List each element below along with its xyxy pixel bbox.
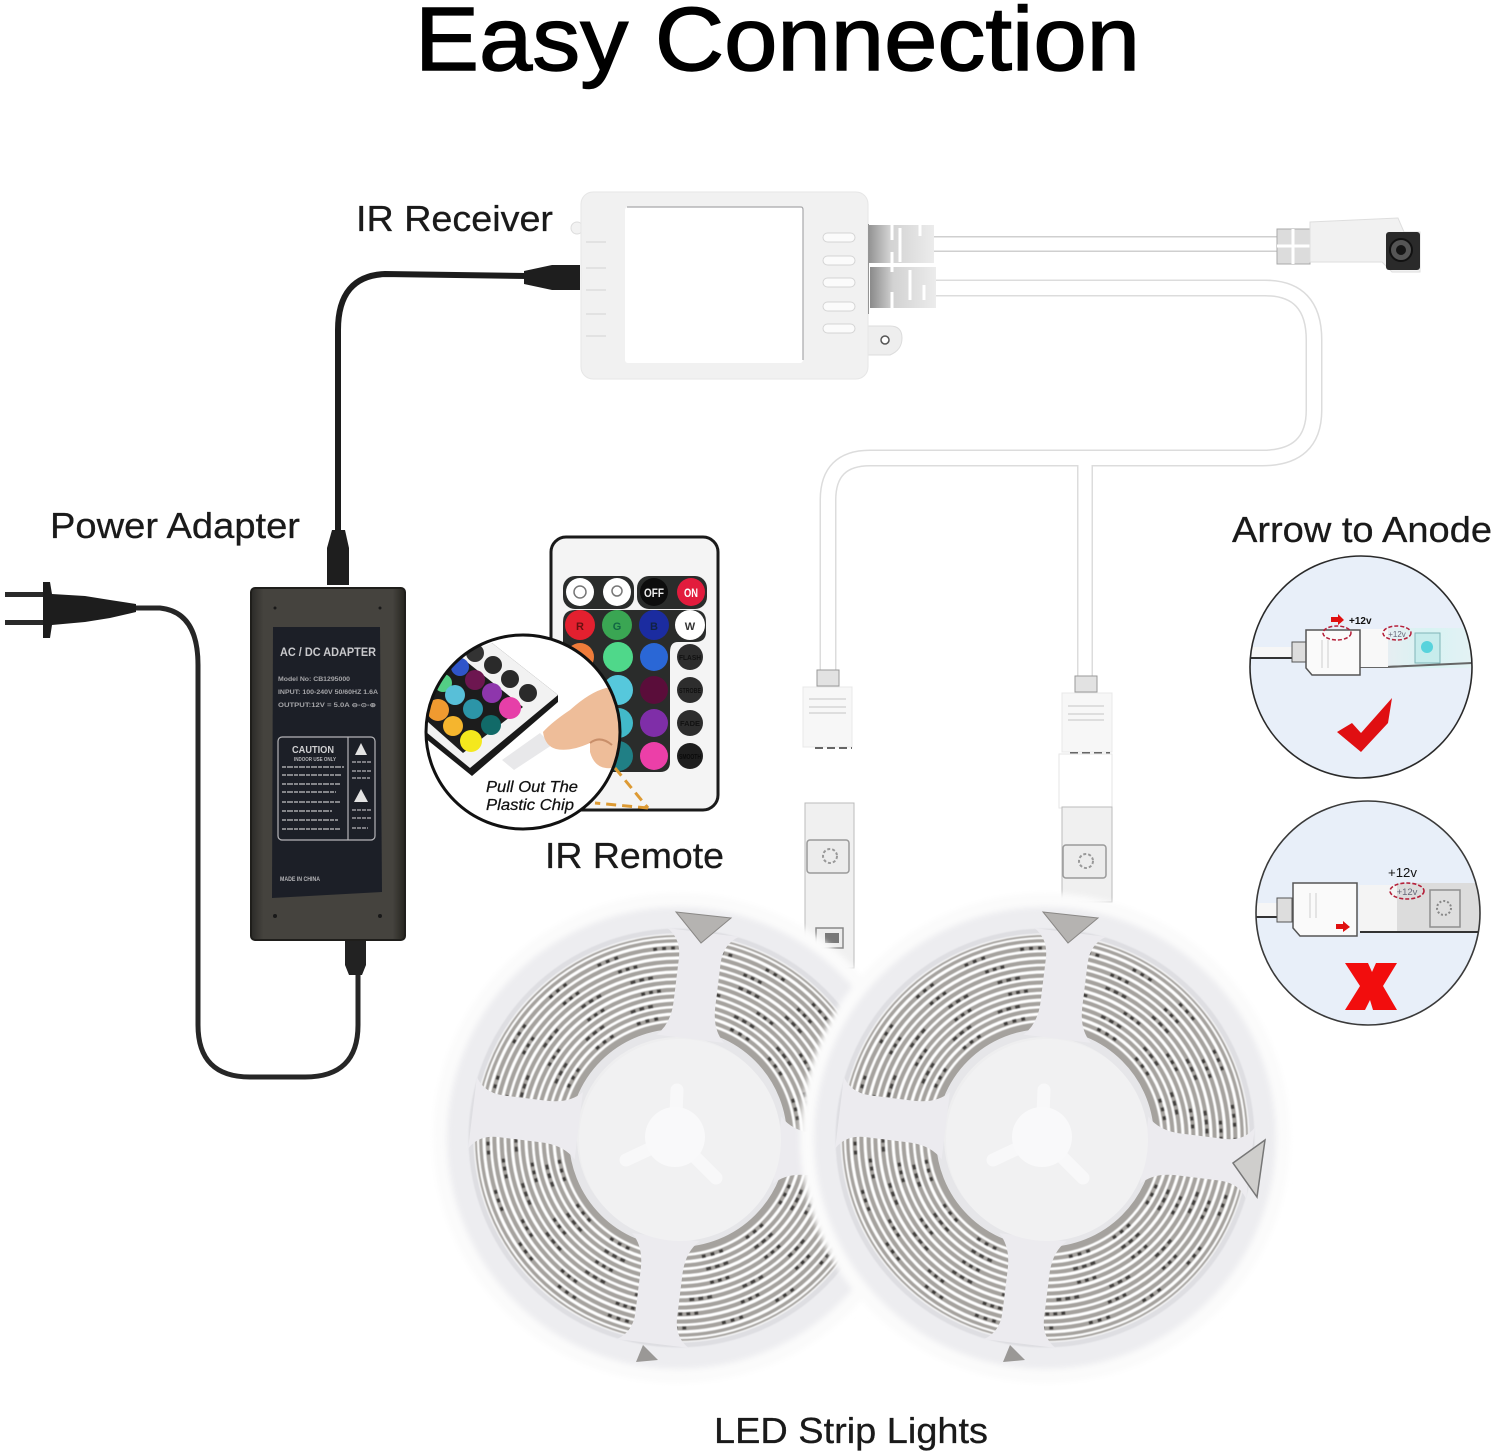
correct connection circle bbox=[1250, 556, 1472, 778]
IR remote: FLASH bbox=[679, 655, 701, 662]
IR remote: R bbox=[576, 621, 584, 633]
IR remote: B bbox=[650, 621, 658, 633]
adapter label: MADE IN CHINA bbox=[280, 877, 321, 883]
icon: red X mark bbox=[1345, 963, 1397, 1010]
LED strip connector: right bbox=[1059, 676, 1112, 902]
correct connection circle: +12v bbox=[1349, 616, 1372, 627]
adapter label: INPUT: 100-240V 50/60HZ 1.6A bbox=[278, 690, 379, 696]
correct connection circle: +12v bbox=[1388, 630, 1406, 639]
IR remote: ON bbox=[684, 586, 698, 600]
IR remote: G bbox=[613, 621, 621, 633]
adapter label: AC / DC ADAPTER bbox=[280, 645, 376, 659]
icon: red check mark bbox=[1337, 698, 1392, 752]
label: IR Receiver: IR Receiver bbox=[356, 198, 553, 239]
inset caption: Plastic Chip bbox=[486, 797, 574, 814]
callout: orange dashed lines bbox=[595, 768, 648, 808]
adapter label: CAUTION bbox=[292, 745, 334, 756]
adapter label: INDOOR USE ONLY bbox=[294, 757, 337, 763]
power cord: adapter to receiver bbox=[327, 265, 580, 585]
IR remote bbox=[551, 537, 718, 810]
adapter label: Model No: CB1295000 bbox=[278, 677, 351, 683]
icon: wall plug bbox=[5, 582, 136, 638]
label: Power Adapter: Power Adapter bbox=[50, 505, 300, 546]
IR receiver controller box bbox=[571, 192, 936, 379]
inset: pull out the plastic chip bbox=[420, 635, 630, 829]
inset caption bbox=[486, 779, 578, 814]
label: Arrow to Anode: Arrow to Anode bbox=[1232, 509, 1492, 550]
LED strip reel: right bbox=[800, 893, 1290, 1383]
IR remote: FADE bbox=[680, 721, 700, 728]
wrong connection circle: +12v bbox=[1397, 887, 1418, 898]
white wire: lower branch to two LED strips bbox=[828, 288, 1314, 680]
adapter label: OUTPUT:12V = 5.0A ⊖-⊙-⊕ bbox=[278, 703, 376, 709]
adapter label bbox=[272, 627, 382, 898]
IR remote: OFF bbox=[644, 586, 664, 600]
inset caption: Pull Out The bbox=[486, 779, 578, 796]
wrong connection circle bbox=[1255, 801, 1481, 1025]
label: IR Remote: IR Remote bbox=[545, 835, 724, 876]
IR remote: W bbox=[685, 621, 696, 633]
IR remote: STROBE bbox=[679, 688, 701, 695]
label: LED Strip Lights: LED Strip Lights bbox=[714, 1410, 988, 1451]
power adapter bbox=[251, 588, 405, 940]
LED strip connector: left bbox=[803, 670, 855, 968]
power cord: plug to adapter bbox=[134, 608, 366, 1077]
white wire: top branch to IR receiver head bbox=[932, 218, 1420, 272]
IR remote: SMOOTH bbox=[679, 754, 701, 761]
wrong connection circle: +12v bbox=[1388, 866, 1418, 880]
LED strip reel: left bbox=[433, 893, 923, 1383]
